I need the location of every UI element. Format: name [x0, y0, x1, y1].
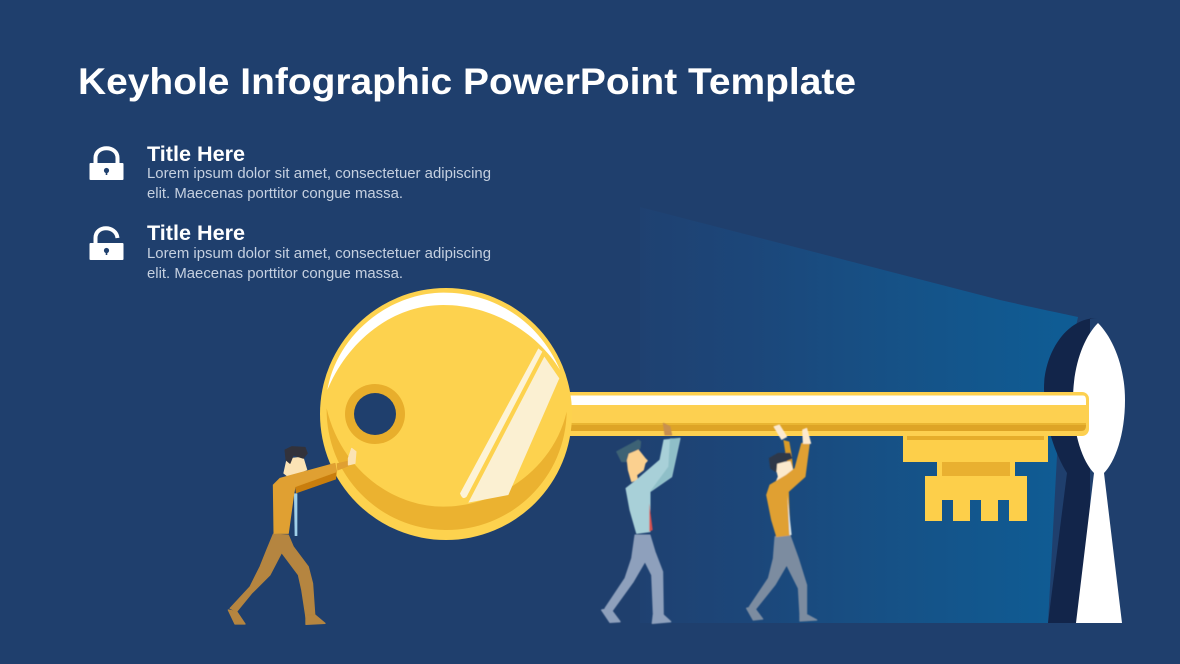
head shadow crescent: [327, 408, 567, 530]
light beam: [640, 207, 1078, 623]
icon: closed padlock: [90, 148, 124, 180]
item body text: elit. Maecenas porttitor congue massa.: [147, 186, 403, 202]
list item: locked: [90, 143, 491, 202]
item body text: Lorem ipsum dolor sit amet, consectetuer adipiscing: [147, 246, 491, 262]
key bit: [903, 436, 1048, 521]
person pushing key head: [228, 447, 356, 624]
head diagonal glare line: [460, 348, 542, 498]
head highlight crescent: [327, 293, 560, 390]
item body text: [147, 166, 491, 202]
list item: unlocked: [90, 222, 491, 282]
title: Keyhole Infographic PowerPoint Template: [78, 61, 856, 102]
person lifting shaft, orange shirt: [747, 425, 817, 621]
keyhole opening: [1073, 323, 1125, 623]
key head: [320, 288, 572, 540]
item heading: Title Here: [147, 143, 245, 166]
icon: open padlock: [90, 228, 124, 260]
head diagonal glare: [468, 357, 559, 503]
key ring hole: [345, 384, 405, 444]
keyhole shadow: [1044, 318, 1097, 623]
key shaft: [560, 392, 1089, 436]
item body text: Lorem ipsum dolor sit amet, consectetuer adipiscing: [147, 166, 491, 182]
key: [320, 288, 1089, 540]
item body text: elit. Maecenas porttitor congue massa.: [147, 266, 403, 282]
item body text: [147, 246, 491, 282]
keyhole: [1044, 318, 1125, 623]
item heading: Title Here: [147, 222, 245, 245]
person lifting shaft, light shirt: [602, 423, 680, 623]
